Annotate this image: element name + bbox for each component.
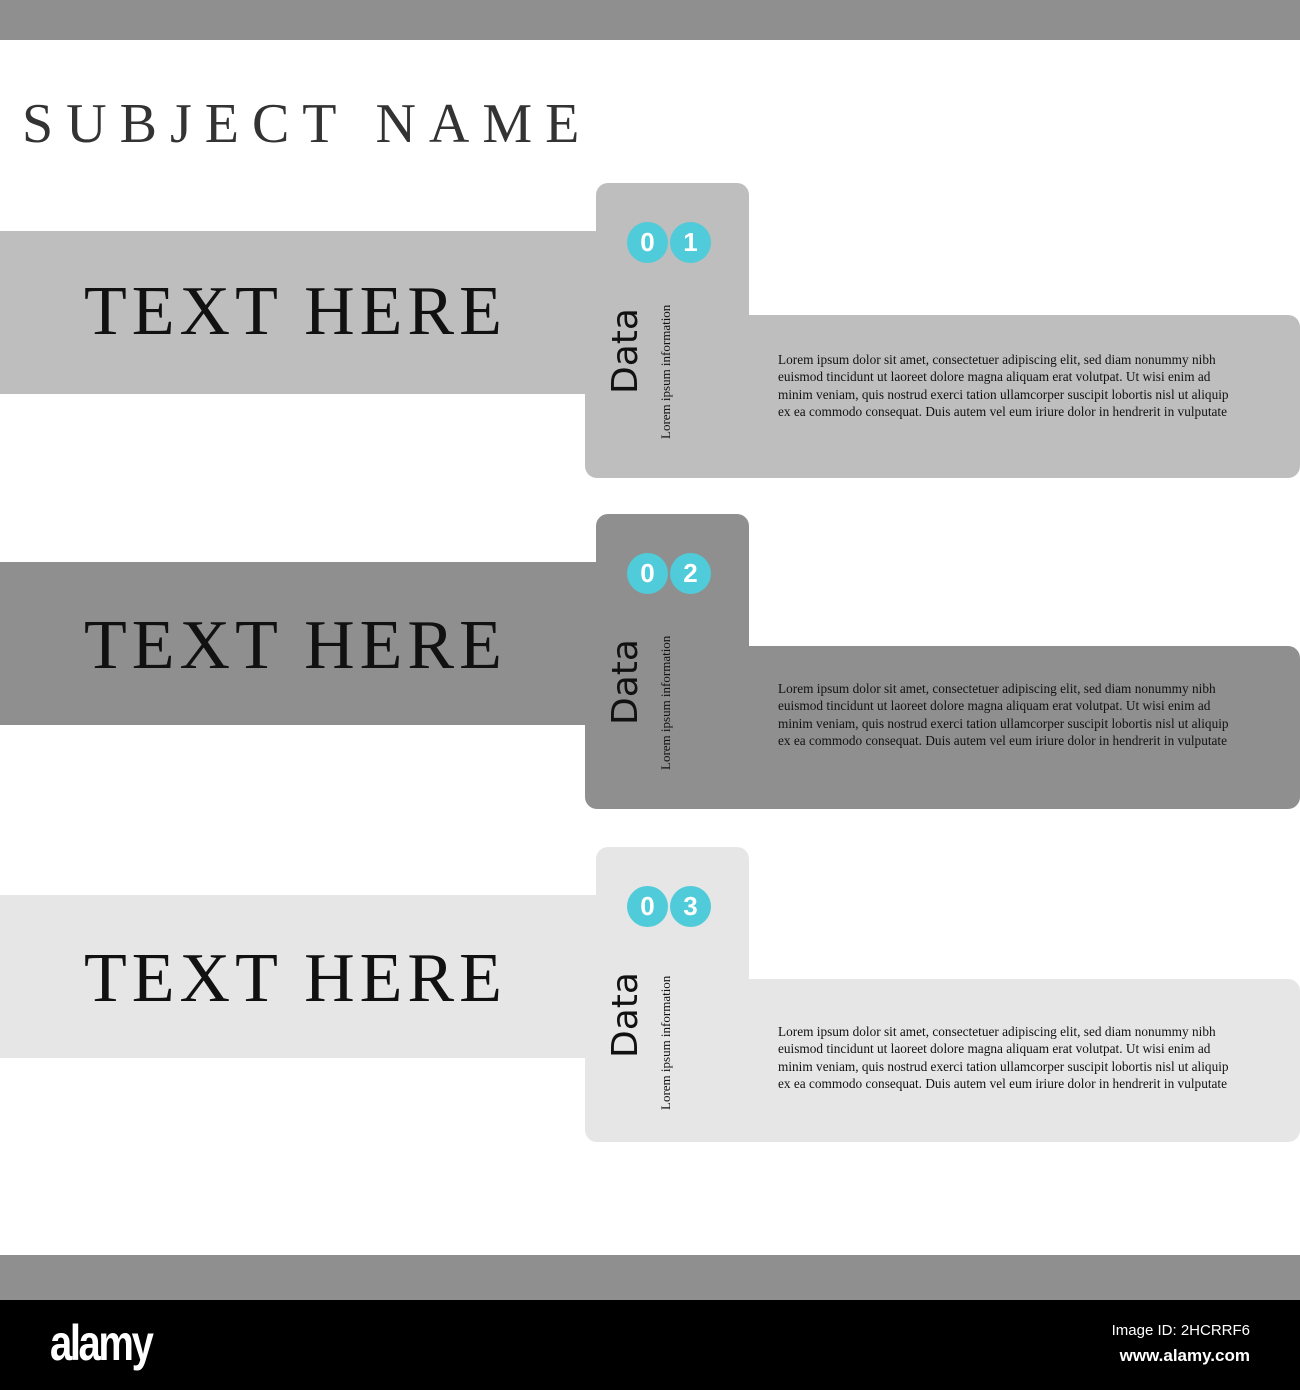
- number 02: 0: [640, 558, 655, 588]
- label data 3: Data: [605, 972, 646, 1058]
- footer: [0, 1300, 1300, 1390]
- paragraph 1: euismod tincidunt ut laoreet dolore magna aliquam erat volutpat. Ut wisi enim ad: [778, 369, 1210, 384]
- paragraph 3: euismod tincidunt ut laoreet dolore magna aliquam erat volutpat. Ut wisi enim ad: [778, 1041, 1210, 1056]
- label data 2: Data: [605, 639, 646, 725]
- label lorem 1: Lorem ipsum information: [658, 305, 673, 439]
- image id: Image ID: 2HCRRF6: [1112, 1322, 1250, 1339]
- logo: alamy: [50, 1315, 151, 1371]
- panel: row 3: [0, 847, 1300, 1142]
- paragraph 3: minim veniam, quis nostrud exerci tation ullamcorper suscipit lobortis nisl ut aliquip: [778, 1059, 1229, 1074]
- paragraph 1: ex ea commodo consequat. Duis autem vel eum iriure dolor in hendrerit in vulputate: [778, 404, 1227, 419]
- number 01: 0: [640, 227, 655, 257]
- box 3: [585, 979, 1300, 1142]
- title: SUBJECT NAME: [22, 93, 592, 155]
- label lorem 2: Lorem ipsum information: [658, 636, 673, 770]
- tab 3: [596, 847, 749, 1077]
- tab 2: [596, 514, 749, 744]
- number 02: 2: [683, 558, 698, 588]
- label data 1: Data: [605, 308, 646, 394]
- paragraph 2: ex ea commodo consequat. Duis autem vel eum iriure dolor in hendrerit in vulputate: [778, 733, 1227, 748]
- paragraph 2: Lorem ipsum dolor sit amet, consectetuer adipiscing elit, sed diam nonummy nibh: [778, 681, 1216, 696]
- paragraph 1: [778, 352, 1229, 419]
- number 03: [627, 886, 711, 927]
- number 03: 3: [683, 891, 698, 921]
- paragraph 2: euismod tincidunt ut laoreet dolore magna aliquam erat volutpat. Ut wisi enim ad: [778, 698, 1210, 713]
- paragraph 3: ex ea commodo consequat. Duis autem vel eum iriure dolor in hendrerit in vulputate: [778, 1076, 1227, 1091]
- heading 2: TEXT HERE: [84, 607, 507, 684]
- paragraph 3: [778, 1024, 1229, 1091]
- paragraph 2: [778, 681, 1229, 748]
- band 2: [0, 562, 605, 725]
- number 01: [627, 222, 711, 263]
- label lorem 3: Lorem ipsum information: [658, 976, 673, 1110]
- box 2: [585, 646, 1300, 809]
- number 03: 0: [640, 891, 655, 921]
- url: www.alamy.com: [1120, 1346, 1250, 1365]
- paragraph 1: minim veniam, quis nostrud exerci tation ullamcorper suscipit lobortis nisl ut aliquip: [778, 387, 1229, 402]
- band 3: [0, 895, 605, 1058]
- panel: row 1: [0, 183, 1300, 478]
- tab 1: [596, 183, 749, 413]
- paragraph 1: Lorem ipsum dolor sit amet, consectetuer adipiscing elit, sed diam nonummy nibh: [778, 352, 1216, 367]
- panel: row 2: [0, 514, 1300, 809]
- paragraph 2: minim veniam, quis nostrud exerci tation ullamcorper suscipit lobortis nisl ut aliquip: [778, 716, 1229, 731]
- band 1: [0, 231, 605, 394]
- top bar: [0, 0, 1300, 40]
- number 01: 1: [683, 227, 698, 257]
- paragraph 3: Lorem ipsum dolor sit amet, consectetuer adipiscing elit, sed diam nonummy nibh: [778, 1024, 1216, 1039]
- box 1: [585, 315, 1300, 478]
- heading 3: TEXT HERE: [84, 940, 507, 1017]
- heading 1: TEXT HERE: [84, 273, 507, 350]
- number 02: [627, 553, 711, 594]
- bottom bar: [0, 1255, 1300, 1300]
